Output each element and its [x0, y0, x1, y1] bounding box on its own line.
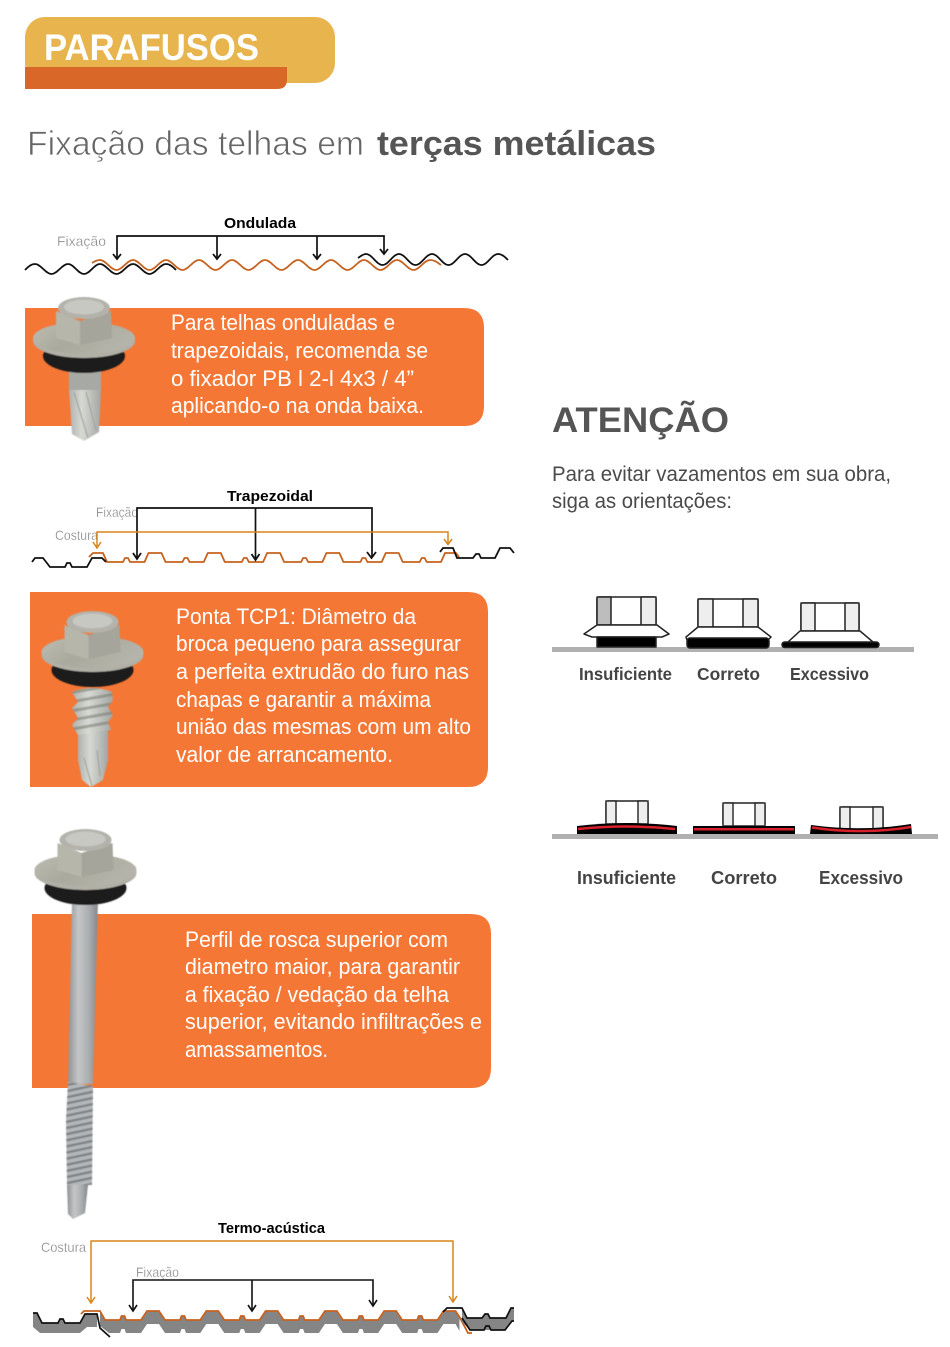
panel text: aplicando-o na onda baixa. [171, 393, 424, 418]
fixacao label: Fixação [136, 1264, 179, 1280]
panel text: Para telhas onduladas e [171, 310, 395, 335]
excessive label: Excessivo [819, 867, 903, 888]
attention text [552, 462, 891, 513]
main heading [27, 125, 656, 163]
screw 2 head [42, 611, 144, 687]
panel: ondulated recommendation [25, 297, 484, 441]
black sheet wave right [358, 254, 508, 265]
panel text: amassamentos. [185, 1037, 328, 1062]
attention text: Para evitar vazamentos em sua obra, [552, 462, 891, 486]
screw 1 neck and drill [69, 368, 101, 441]
screw 1 head [33, 297, 135, 373]
panel text: a perfeita extrudão do furo nas [176, 659, 469, 684]
costura label: Costura [55, 527, 98, 543]
right panel [443, 1308, 514, 1330]
fixing arrows [133, 508, 376, 560]
screw photo 3 [34, 829, 136, 1219]
correct label: Correto [711, 867, 777, 888]
termo-acustica title: Termo-acústica [218, 1220, 326, 1237]
seam arrows [87, 1241, 457, 1303]
panel text: valor de arrancamento. [176, 742, 393, 767]
correct screw [693, 803, 795, 834]
ondulada title: Ondulada [224, 215, 297, 232]
panel text: superior, evitando infiltrações e [185, 1009, 482, 1034]
diagram: ondulada [25, 215, 508, 274]
panel text: chapas e garantir a máxima [176, 687, 432, 712]
gauge diagram: sealing washer [552, 801, 938, 888]
surface line [552, 647, 914, 652]
attention text: siga as orientações: [552, 489, 732, 513]
fixing arrows [129, 1280, 377, 1311]
screw photo 2 [42, 611, 144, 787]
badge title: PARAFUSOS [44, 27, 259, 68]
orange trapezoid sheet [89, 553, 459, 562]
diagram: termo-acustica [33, 1220, 514, 1337]
panel: upper thread profile [32, 829, 491, 1219]
surface line [552, 834, 938, 839]
excessive screw [810, 807, 912, 834]
panel text: broca pequeno para assegurar [176, 631, 461, 656]
fixacao label: Fixação [57, 233, 106, 249]
screw 3 head [34, 829, 136, 905]
left panel [33, 1313, 110, 1337]
correct label: Correto [697, 664, 760, 684]
seam arrows [93, 532, 452, 548]
black trapezoid sheet left [32, 558, 106, 567]
insufficient screw [584, 597, 669, 647]
heading bold part: terças metálicas [377, 125, 656, 163]
fixacao label: Fixação [96, 504, 138, 520]
panel text: diametro maior, para garantir [185, 954, 460, 979]
insufficient label: Insuficiente [577, 867, 676, 888]
badge yellow background [25, 17, 335, 83]
excessive label: Excessivo [790, 664, 869, 684]
black trapezoid sheet right [440, 548, 514, 558]
excessive screw [782, 603, 879, 648]
header badge [25, 17, 335, 89]
insulated centre panel [100, 1311, 459, 1333]
badge orange strip [25, 67, 287, 89]
panel background [32, 914, 491, 1088]
panel background [25, 308, 484, 426]
panel text [176, 604, 471, 767]
screw photo 1 [33, 297, 135, 441]
black sheet wave left [25, 264, 176, 274]
screw 3 tip [67, 1185, 88, 1219]
panel text [171, 310, 428, 418]
correct screw [686, 599, 771, 648]
panel text [185, 927, 482, 1062]
insufficient label: Insuficiente [579, 664, 672, 684]
panel text: a fixação / vedação da telha [185, 982, 450, 1007]
heading light part: Fixação das telhas em [27, 125, 364, 163]
panel text: união das mesmas com um alto [176, 714, 471, 739]
panel text: o fixador PB l 2-l 4x3 / 4” [171, 366, 414, 391]
diagram: trapezoidal [32, 488, 514, 567]
panel: TCP1 tip [30, 592, 488, 787]
screw 3 shaft [68, 900, 98, 1084]
orange top sheet [81, 1311, 472, 1333]
attention heading: ATENÇÃO [552, 401, 729, 440]
screw 2 thread and tip [72, 688, 113, 787]
insufficient screw [577, 801, 677, 834]
fixing arrows [113, 236, 388, 259]
costura label: Costura [41, 1239, 86, 1255]
gauge diagram: washer compression [552, 597, 914, 684]
orange sheet wave [92, 260, 441, 270]
panel text: Ponta TCP1: Diâmetro da [176, 604, 417, 629]
panel text: Perfil de rosca superior com [185, 927, 448, 952]
screw 3 thread [66, 1082, 93, 1185]
trapezoidal title: Trapezoidal [227, 488, 313, 505]
panel text: trapezoidais, recomenda se [171, 338, 428, 363]
panel background [30, 592, 488, 787]
